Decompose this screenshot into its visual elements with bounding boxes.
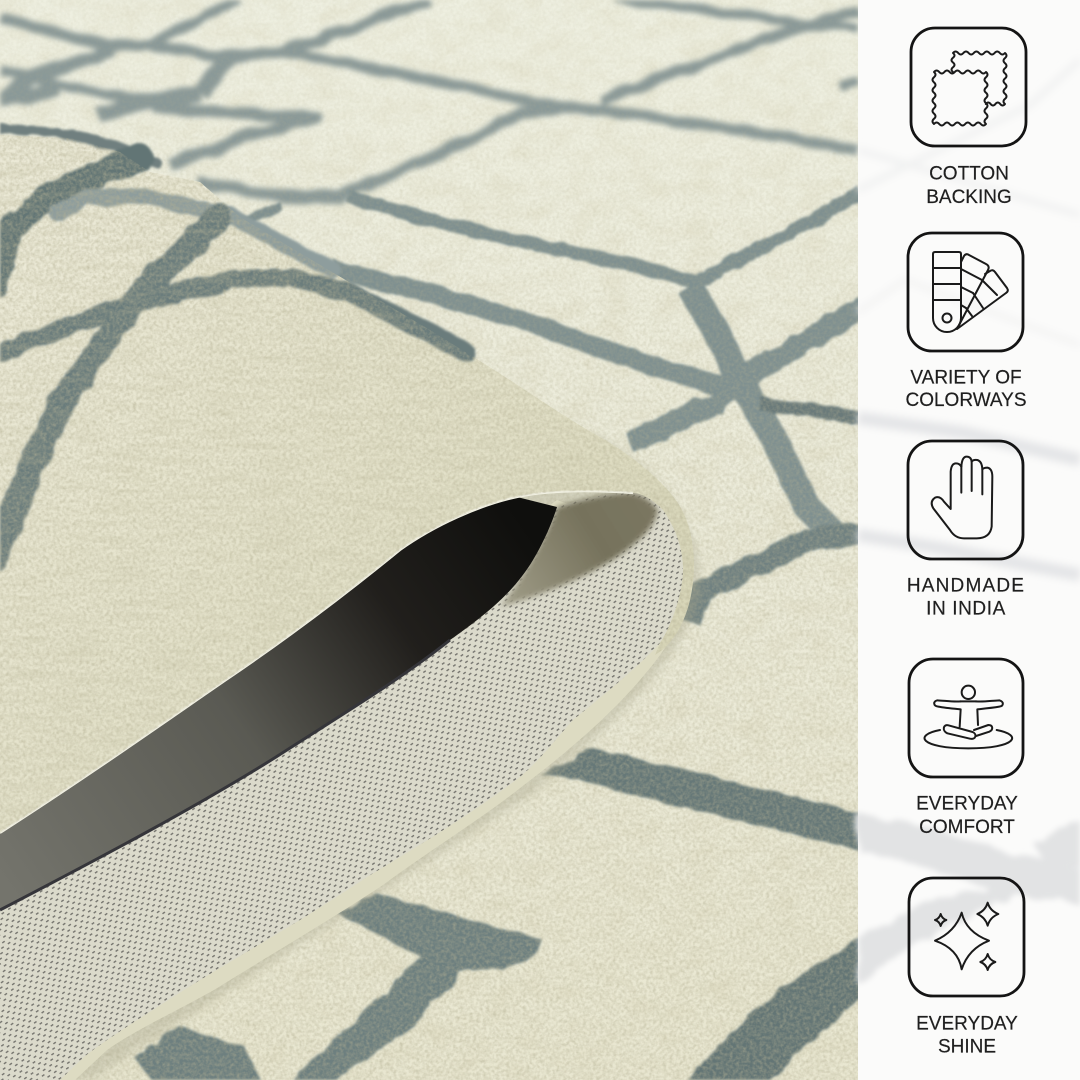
rug lower line pattern — [134, 748, 870, 1080]
label: variety of colorways: COLORWAYS — [905, 390, 1027, 411]
icon: seated meditation figure — [909, 659, 1023, 777]
label: everyday shine: SHINE — [938, 1036, 996, 1058]
pattern lines on the fold — [0, 128, 465, 560]
icon: fabric swatches — [911, 28, 1026, 146]
icon: open hand — [908, 441, 1023, 559]
fold lip highlight — [0, 491, 633, 833]
pile texture on the fold — [0, 130, 700, 840]
icon: sparkles — [909, 878, 1024, 996]
folded top surface — [0, 135, 694, 833]
feature: everyday shine — [909, 878, 1024, 1058]
right feature panel — [858, 0, 1080, 1080]
label: variety of colorways: VARIETY OF — [910, 368, 1022, 388]
label: handmade in india: HANDMADE — [907, 576, 1025, 596]
label: cotton backing: COTTON — [929, 164, 1009, 184]
label: everyday comfort: EVERYDAY — [916, 794, 1018, 814]
rug underside woven backing — [0, 493, 683, 1080]
feature: cotton backing — [911, 28, 1026, 208]
rug pile texture — [0, 0, 858, 1080]
dark gap under the fold — [0, 497, 557, 910]
feature: variety of colorways — [905, 233, 1027, 411]
shaded backing inside the fold — [500, 493, 658, 607]
label: everyday shine: EVERYDAY — [916, 1014, 1018, 1034]
fold shadow — [76, 438, 702, 1080]
label: handmade in india: IN INDIA — [926, 598, 1006, 620]
rug edge binding — [60, 500, 665, 1080]
mid-distance rug line pattern — [243, 193, 864, 622]
label: everyday comfort: COMFORT — [919, 817, 1015, 838]
wool colour mottling — [0, 0, 858, 1080]
rolled rug corner — [0, 128, 700, 1080]
feature: handmade in india — [907, 441, 1025, 620]
label: cotton backing: BACKING — [926, 187, 1012, 208]
icon: colour fan deck — [908, 233, 1023, 351]
out-of-focus rug line pattern, top — [0, 0, 858, 197]
faded lower pattern blotch — [858, 815, 1080, 985]
feature: everyday comfort — [909, 659, 1023, 838]
faded pattern behind the panel — [858, 60, 1080, 575]
